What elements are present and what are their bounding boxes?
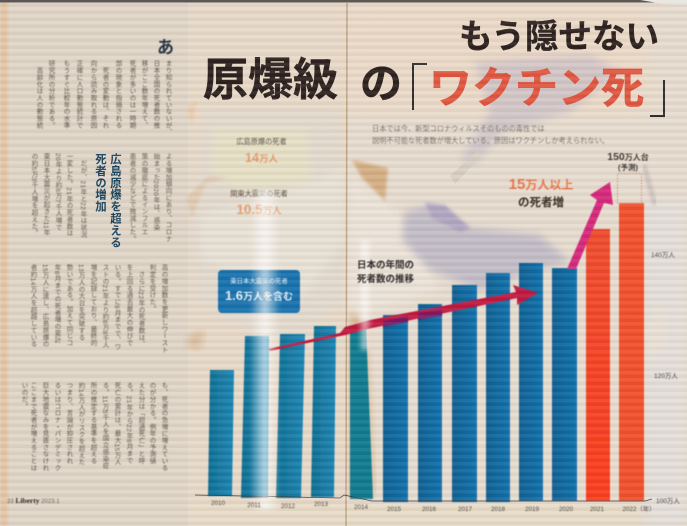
article text: upper block: 正確に人口動態統計で [75,60,82,128]
article text: lower block: いのだ。 [20,382,27,409]
article text: upper block: 研究所の分析である。 [47,60,54,128]
callout: Hiroshima deaths: 広島原爆の死者 [236,137,287,146]
article text: lower block: 15万人に達し、広島原爆の [41,264,48,347]
article text: lower block [20,264,168,472]
article text: upper block: 始まった2020年は、感染 [152,153,159,231]
rising trend arrow [268,285,538,351]
bars [208,174,644,502]
lead text: 説明不可能な死者数が増大している。原因はワクチンしか考えられない。 [372,136,609,145]
bar 2019 [519,263,543,501]
article text: upper block: 20年より約6万7千人増で [54,153,61,231]
bar 2013 [311,326,336,497]
year labels: 2017 [458,506,472,513]
bar 2014 [350,327,373,499]
article text: upper block: よる増加傾向にあり、コロナ [164,153,171,242]
article text: upper block: 一変した。21年の死者数は [65,153,72,236]
callout: Tohoku earthquake deaths: 東日本大震災の死者 [230,278,288,285]
chart title: 死者数の推移 [357,273,415,285]
callout: 15万人以上の死者増: 15万人以上 [509,176,573,193]
title bracket open [412,63,427,110]
title word: ワクチン死: ワクチン死 [429,65,644,113]
title [203,19,665,117]
title line: もう隠せない: もう隠せない [459,19,659,56]
article text: lower block: ここまで死者が増えることは [29,382,36,471]
center fold [346,3,347,526]
lead text [372,124,609,145]
article text: upper block: 策の徹底によるインフルエ [140,153,147,235]
title word: 原爆級: 原爆級 [203,54,338,105]
year labels: 2010 [211,500,225,507]
year labels: 2021 [590,506,604,513]
article text: upper block: 高齢化は人の動態統 [35,67,42,128]
article text: lower block: つまり、言論が抑圧されれ [65,382,72,464]
article text: lower block: のが分かる。例年の予測値 [148,382,155,464]
article text: upper block: まり知られていないが、 [164,60,171,135]
photo tones [190,110,345,340]
year labels: 2013 [314,501,328,508]
article text: upper block: だが、21年と22年は状況 [79,160,86,238]
page footer: folio and magazine name: 33 Liberty 2023.1 [7,496,60,505]
axis labels: 140万人 [651,251,675,259]
article text: lower block: さらに22年の死者数は、 [137,271,144,347]
article text: lower block: を上回る過去最大の伸びで [125,264,132,346]
steep pink arrow [567,182,613,269]
callout: 15万人以上の死者増 [509,176,573,209]
light glare [250,190,280,510]
article text: upper block: 東日本大震災が起きた11年 [42,153,49,236]
article text: lower block: も、死者の急増に増えている [160,382,167,471]
article text: upper block: 部の現象と指摘される [114,60,121,128]
title bracket close [650,80,665,117]
bar 2021 [586,229,610,501]
title word: の: の [360,60,402,107]
article text: lower block: いる。すでに9月までで、ワ [113,264,120,350]
article text: lower block: 13万人の大台を突破する [77,264,84,340]
year labels [211,500,655,513]
article text: upper block: 死者が多いのは一時期 [128,60,135,128]
bar 2022 dashed forecast top [618,174,642,204]
year labels: 2020 [559,506,573,513]
callout: 150万人台(予測) [607,151,649,172]
axis labels [651,251,680,505]
year labels: 2022（年） [623,504,655,513]
article text: upper block [30,38,174,248]
year labels: 2019 [525,506,539,513]
chart title: 日本の年間の [357,259,414,271]
article text: lower block: 高の増加数を更新しワースト [160,264,167,353]
bar 2015 [383,315,408,502]
callout: Tohoku earthquake deaths [218,270,300,313]
bar 2017 [452,285,477,502]
article text: lower block: 巨大地震なみを見直さなけれ [41,382,48,471]
article text: lower block: 所の推定する基準を超える [89,382,96,464]
bar 2022 forecast [619,203,644,501]
axis labels: 100万人 [656,497,680,505]
article text: upper block: 日本全国の死者数の推 [152,60,159,128]
callout: Kanto earthquake deaths [230,188,288,217]
article text: lower block: ストの21年より約8万8千人 [101,264,108,348]
year labels: 2014 [354,504,368,511]
article text: upper block: 死者の変動は、それ [101,67,108,128]
year labels: 2018 [491,506,505,513]
article text: lower block: えた分は「超過死亡」と呼 [137,382,144,464]
article text: lower block: 死亡の累計は、最大15万人 [113,382,120,465]
callout: 15万人以上の死者増: の死者増 [518,195,564,209]
article text: upper block: 患者の減少などで微減した。 [128,153,135,242]
lead text: 日本では今、新型コロナウィルスそのものの毒性では [372,124,545,133]
article text: lower block: 約14万人がリスクを超えた [77,382,84,465]
bar 2010 [208,370,234,496]
year labels: 2011 [247,502,261,509]
axis labels: 120万人 [654,372,678,380]
bar 2012 [276,334,305,498]
article text: upper block: 向から読み取れる原因 [89,60,96,128]
article text: lower block: る。11万5千人を国立感染症 [101,382,108,469]
year labels: 2012 [281,503,295,510]
article text: upper block: 移がここ数年増えて、 [140,60,147,128]
article text: lower block: 増を記録しており、最終的 [89,264,96,346]
article text: lower block: 年8月までの死者増の累計 [53,264,60,343]
drop cap: あ [157,38,174,57]
article text: lower block: るいはコロナ・パンデミック [53,382,60,471]
bar 2018 [486,273,510,502]
article text: upper block: の約5万3千人増を超えた。 [30,153,37,236]
callout: Tohoku earthquake deaths: 1.6万人を含む [225,288,293,303]
callout: Hiroshima deaths: 14万人 [245,151,278,165]
article text: lower block: 判定を受けた。 [148,264,155,312]
axis baseline [195,495,652,501]
year labels: 2016 [422,506,436,513]
bar 2020 [552,268,577,501]
bar 2016 [418,304,442,502]
bar 2011 [241,336,269,498]
article text: upper block: もうすぐ比較年の水準 [62,60,69,128]
section heading: 広島原爆を超える [109,153,121,248]
callout: 150万人台(予測): 150万人台 [607,151,649,163]
article text: upper block: 死者の増加 [94,153,106,212]
year labels: 2015 [387,506,401,513]
article text: lower block: る。21年から22年8月まで [125,382,132,463]
callout: Kanto earthquake deaths: 10.5万人 [236,202,282,217]
article text: lower block: 勢いである。加えて同じコ [65,264,72,346]
callout: Hiroshima deaths [236,137,287,165]
callout: 150万人台(予測): (予測) [618,162,638,172]
article text: lower block: 者約14万人を超越している [29,264,36,347]
callout: Kanto earthquake deaths: 関東大震災の死者 [230,189,288,198]
chart title [357,259,415,285]
